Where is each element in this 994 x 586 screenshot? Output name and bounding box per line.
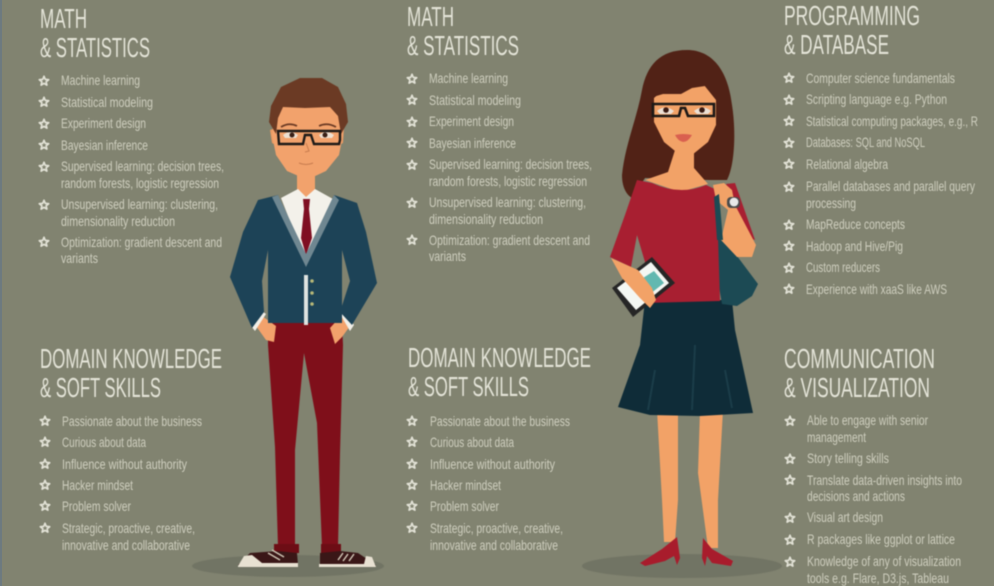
list: Optimization: gradient descent and [429,232,590,248]
heading: & DATABASE [784,29,889,60]
heading [40,343,222,403]
list: Machine learning [429,70,508,86]
forearm and hand [611,258,656,308]
list: variants [429,248,466,264]
list: Problem solver [430,498,499,514]
list: MapReduce concepts [806,216,905,232]
ears [270,128,344,146]
list: Relational algebra [806,156,888,172]
red heels [640,537,733,566]
eyes [657,108,711,114]
skirt folds [648,345,732,410]
neck and chest [645,150,708,192]
list: random forests, logistic regression [429,173,587,189]
top [610,180,720,303]
eyebrows [281,124,336,127]
panel: man domain knowledge and soft skills [40,343,222,553]
ground shadow: woman [582,554,782,578]
skirt [618,300,753,416]
bag [716,237,758,306]
panel: programming and database [784,0,978,297]
list: decisions and actions [807,488,905,504]
panel: communication and visualization [784,343,962,586]
heading: & SOFT SKILLS [408,371,529,402]
list: Databases: SQL and NoSQL [806,134,925,150]
bag strap [714,194,723,240]
heading [407,1,519,61]
list: Story telling skills [807,450,889,466]
panel: man math and statistics [39,3,224,266]
list: innovative and collaborative [62,537,190,553]
face [654,85,716,155]
list: Statistical modeling [61,94,153,110]
list: Strategic, proactive, creative, [62,520,195,536]
list: Bayesian inference [61,137,148,153]
glasses [278,131,340,144]
list [784,70,978,297]
heading: DOMAIN KNOWLEDGE [408,342,591,373]
list: tools e.g. Flare, D3.js, Tableau [807,570,949,586]
list: Machine learning [61,72,140,88]
face [272,100,343,178]
list: Hacker mindset [62,477,133,493]
legs [657,410,723,548]
list [40,413,202,553]
heading: & STATISTICS [407,30,519,61]
list: Experiment design [61,115,146,131]
list: Curious about data [430,434,514,450]
list: management [807,429,866,445]
heading: & STATISTICS [40,32,150,63]
list: dimensionality reduction [429,211,543,227]
list [785,412,962,586]
list: processing [806,195,856,211]
hair [269,78,348,134]
list: Curious about data [62,434,146,450]
shirt [281,189,333,262]
panel: woman math and statistics [407,1,592,264]
list: Unsupervised learning: clustering, [429,194,586,210]
panel: woman domain knowledge and soft skills [407,342,591,553]
list: Unsupervised learning: clustering, [61,196,218,212]
bangs [653,62,718,100]
list: Custom reducers [806,259,880,275]
heading [408,342,591,402]
heading: DOMAIN KNOWLEDGE [40,343,222,374]
woman figure [582,50,782,578]
list: Influence without authority [430,456,555,472]
list: Supervised learning: decision trees, [61,158,224,174]
left edge strip [0,0,2,586]
list: dimensionality reduction [61,213,175,229]
placket and buttons [304,275,314,325]
raised sleeve [726,183,755,240]
list: Able to engage with senior [807,412,928,428]
list: Hacker mindset [430,477,501,493]
list: variants [61,250,98,266]
list [407,413,570,553]
list: Visual art design [807,509,883,525]
watch [727,197,740,208]
right arm skin [713,183,756,257]
hands [256,316,350,344]
mouth and nose [299,143,313,164]
neck [297,170,315,206]
list: Influence without authority [62,456,187,472]
list: Hadoop and Hive/Pig [806,238,903,254]
heading: MATH [407,1,454,32]
jacket [230,195,377,328]
heading [40,3,150,63]
list: Scripting language e.g. Python [806,91,947,107]
glasses [653,104,714,116]
list: random forests, logistic regression [61,175,219,191]
list: Passionate about the business [430,413,570,429]
list: Statistical modeling [429,92,521,108]
list [39,72,224,266]
list: innovative and collaborative [430,537,558,553]
shirt cuffs [251,311,354,331]
eyes [283,132,334,138]
list: Bayesian inference [429,135,516,151]
trousers [268,322,343,547]
lips [675,134,692,142]
heading: & SOFT SKILLS [40,372,161,403]
heading: MATH [40,3,87,34]
list [407,70,592,264]
list: Strategic, proactive, creative, [430,520,563,536]
shoes [238,544,376,567]
tablet [612,257,675,317]
heading [784,0,920,60]
heading [784,343,935,403]
tie [301,199,312,255]
list: Supervised learning: decision trees, [429,156,592,172]
ground shadow: man [192,555,384,577]
list: Passionate about the business [62,413,202,429]
list: Optimization: gradient descent and [61,234,222,250]
list: Problem solver [62,498,131,514]
lapels [272,195,339,267]
man figure [192,78,384,577]
list: Experiment design [429,113,514,129]
hair back [622,50,734,198]
